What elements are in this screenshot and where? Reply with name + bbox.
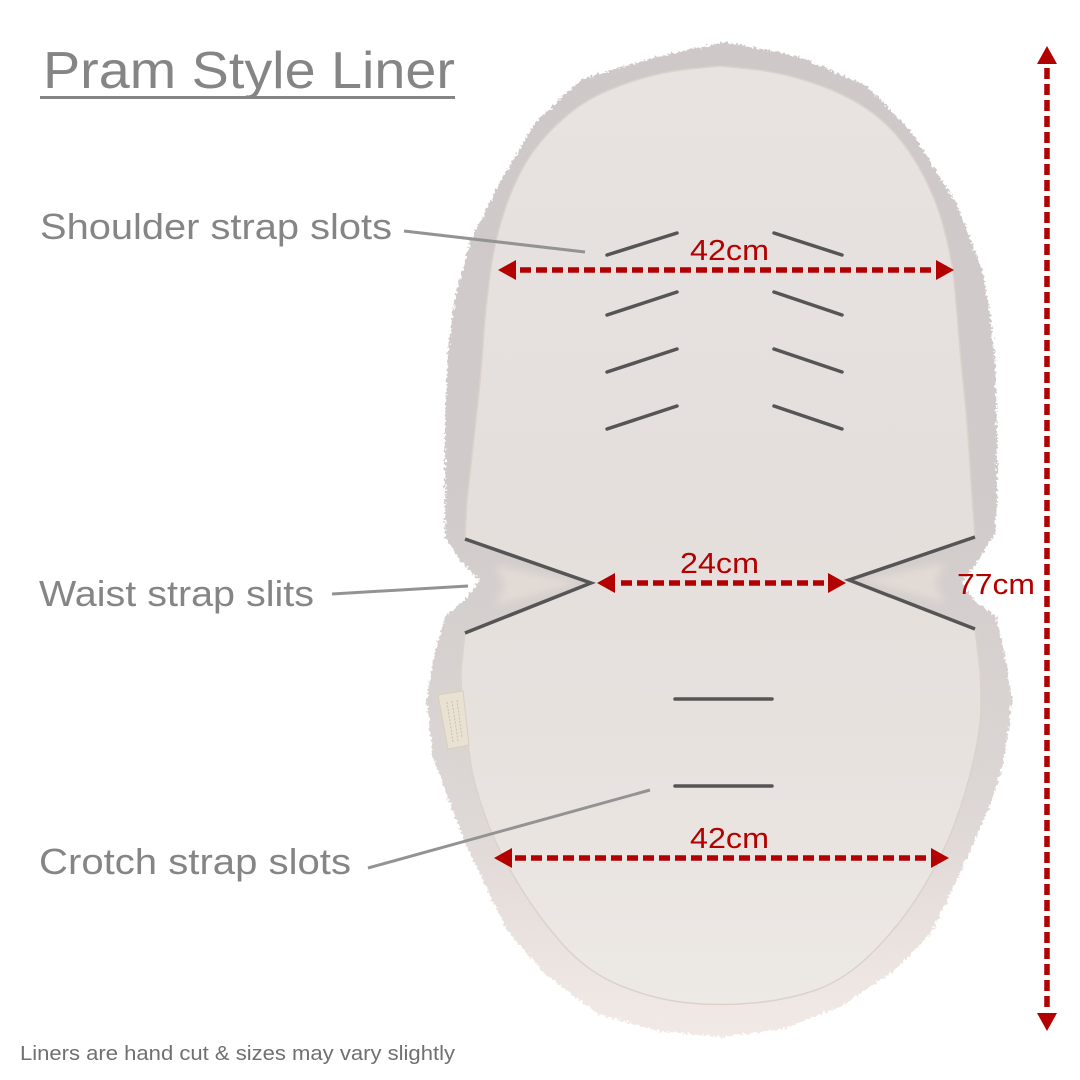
waist strap slits — [465, 537, 975, 633]
fur border — [428, 43, 1011, 1036]
shoulder strap slots — [607, 233, 842, 429]
arrow: upper width 42cm: 42cm — [690, 235, 769, 267]
waist fur wedge left — [495, 565, 580, 606]
arrow: waist width 24cm — [597, 548, 846, 593]
arrow: waist width 24cm: 24cm — [680, 548, 759, 580]
footnote: Liners are hand cut & sizes may vary slightly — [20, 1043, 455, 1065]
label: waist strap slits: Waist strap slits — [39, 573, 314, 614]
label: waist strap slits — [39, 573, 468, 614]
arrow: height 77cm — [957, 46, 1057, 1031]
arrow: lower width 42cm — [494, 823, 949, 868]
label: crotch strap slots — [39, 790, 650, 882]
title: Pram Style Liner — [43, 42, 455, 100]
arrow: lower width 42cm: 42cm — [690, 823, 769, 855]
label: crotch strap slots: Crotch strap slots — [39, 841, 351, 882]
label: shoulder strap slots — [40, 206, 585, 252]
liner: sheepskin pram liner — [428, 43, 1011, 1036]
crotch strap slots — [675, 699, 772, 786]
label tag — [438, 691, 469, 749]
leather centre panel — [461, 66, 981, 1004]
waist fur wedge right — [860, 563, 945, 603]
arrow: upper width 42cm — [498, 235, 954, 280]
arrow: height 77cm: 77cm — [957, 569, 1035, 601]
label: shoulder strap slots: Shoulder strap slots — [40, 206, 392, 247]
